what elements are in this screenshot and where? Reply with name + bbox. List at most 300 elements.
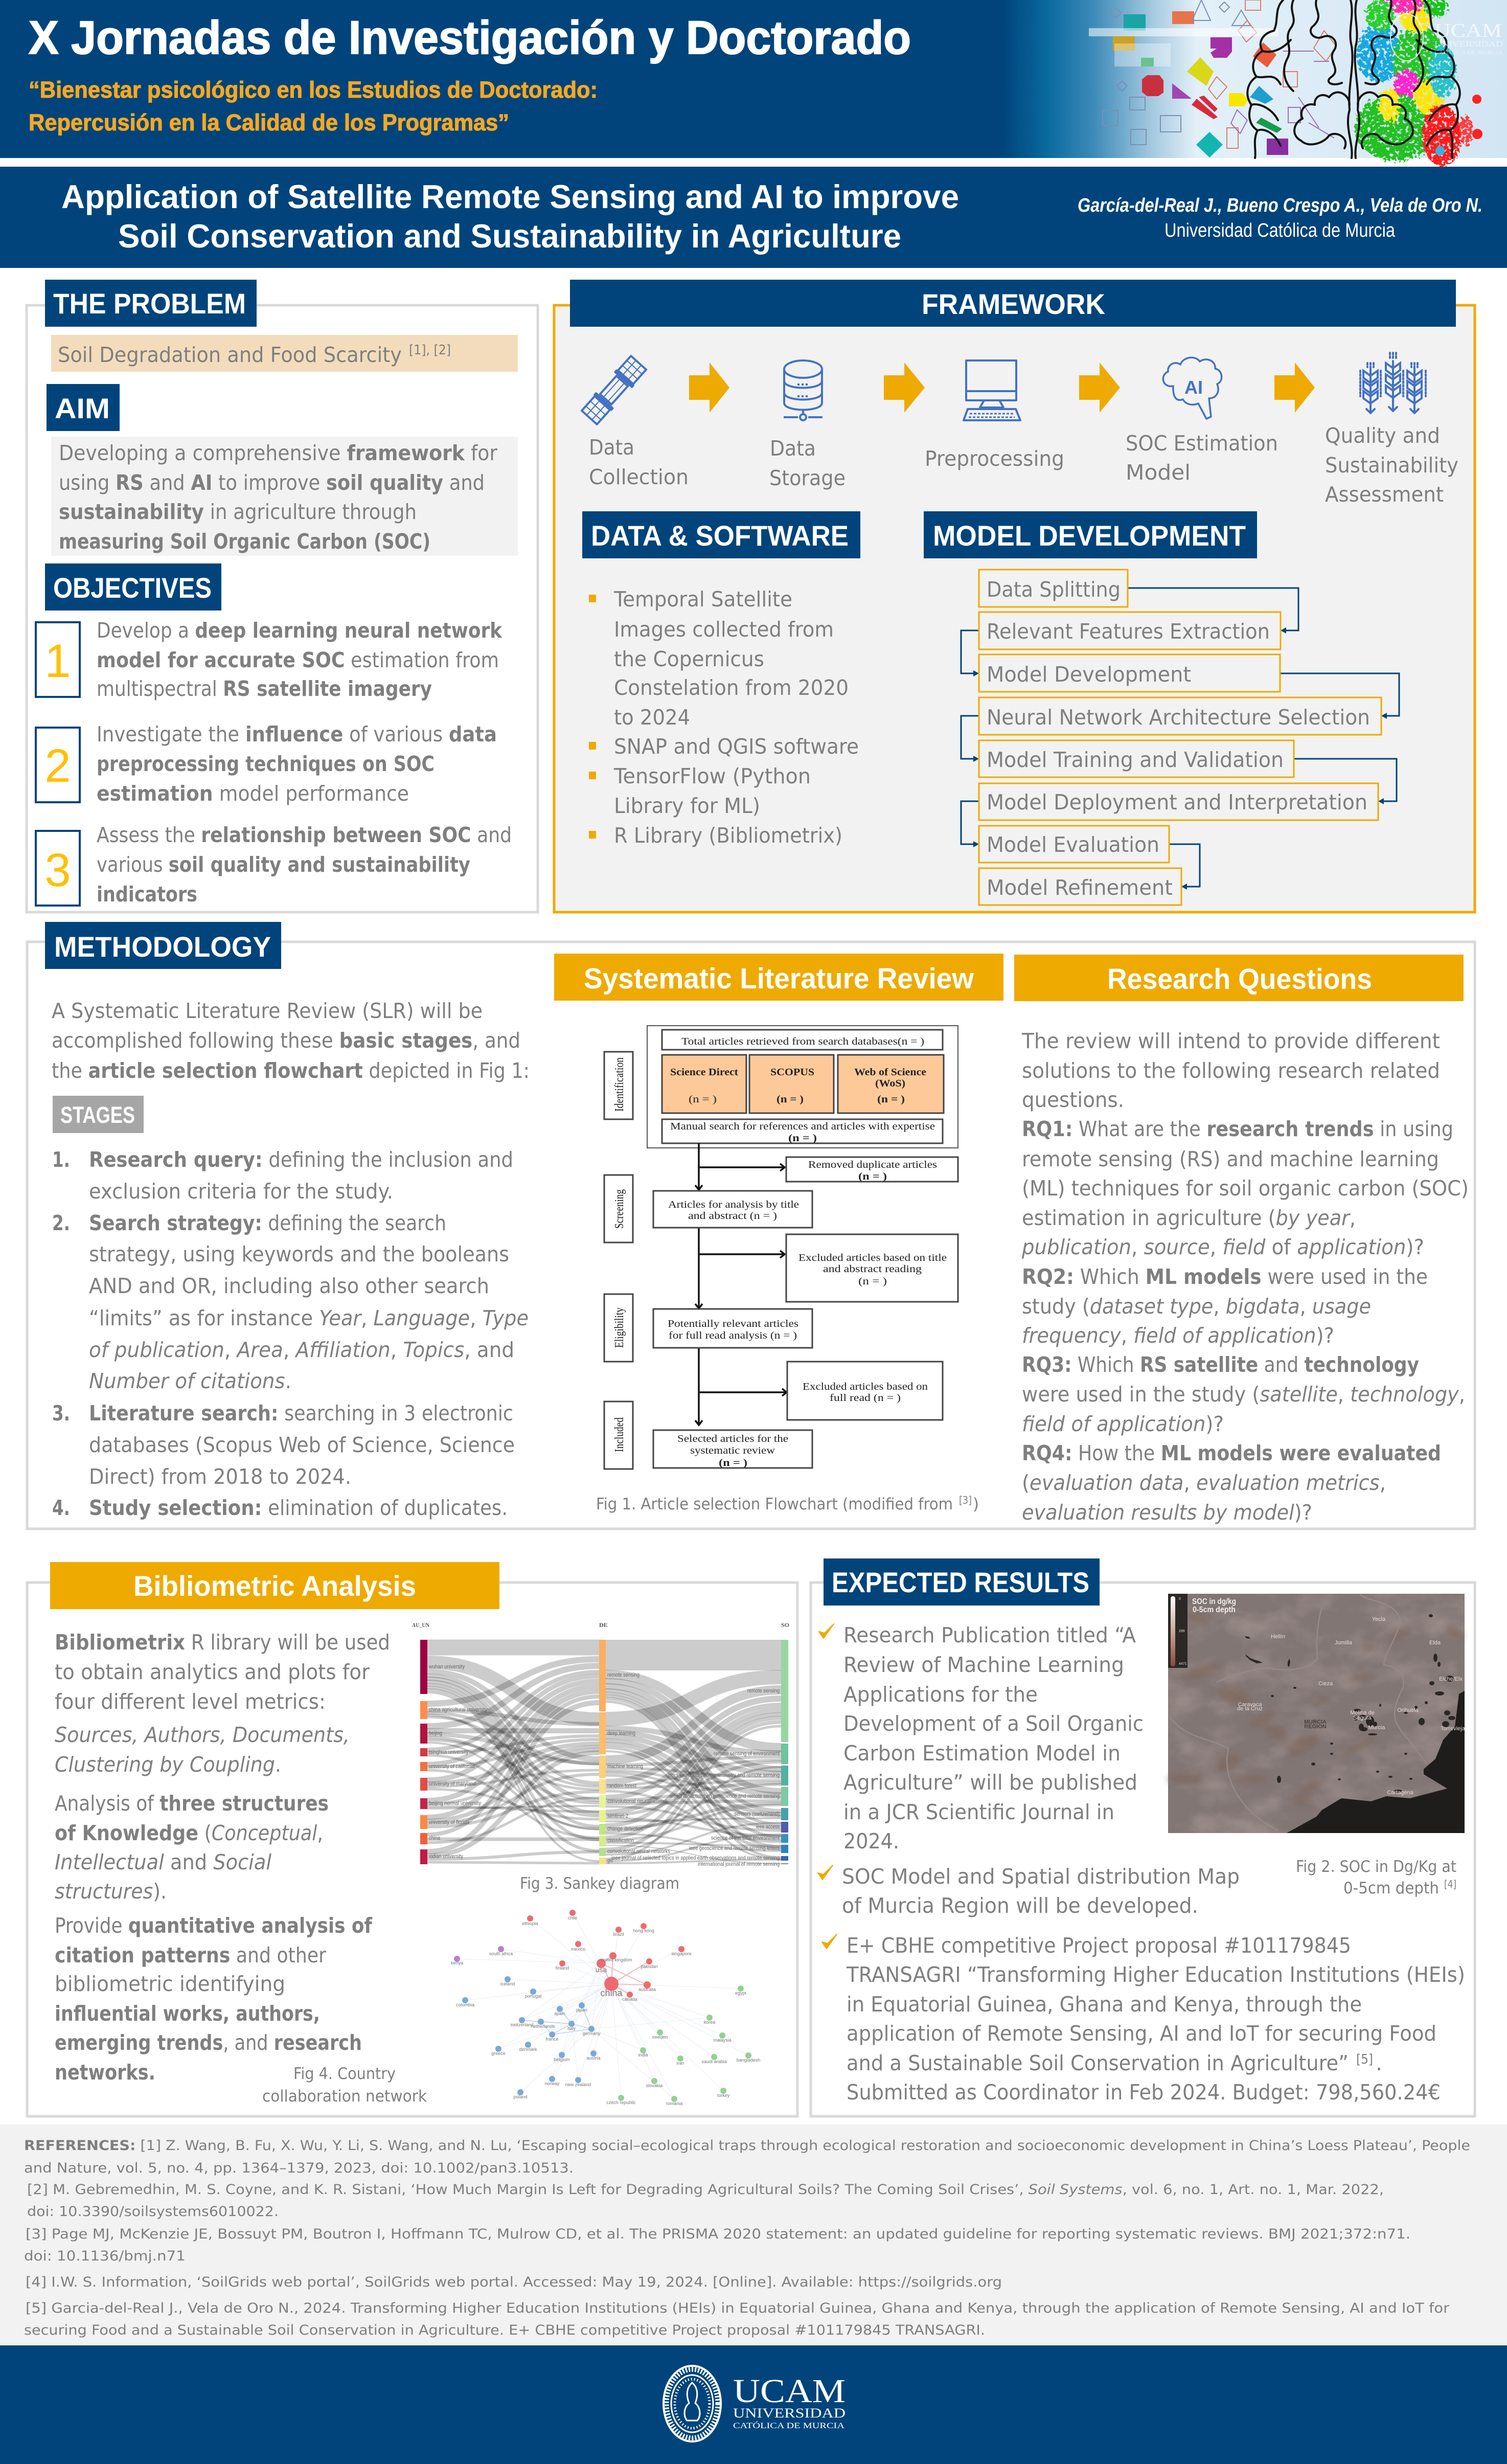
poster title: Application of Satellite Remote Sensing and AI to improve	[61, 178, 959, 215]
footer	[0, 2345, 1507, 2464]
panel: bibliometric analysis	[27, 1562, 797, 2116]
nodes: keywords	[599, 1640, 606, 1864]
node labels: change detection	[607, 1826, 643, 1832]
label: data collection: Data	[589, 435, 634, 460]
heading: the problem	[45, 280, 257, 327]
result 1: Carbon Estimation Model in	[843, 1741, 1121, 1766]
bibliometrix text: Provide quantitative analysis of	[55, 1913, 373, 1938]
figure 1 caption: )	[973, 1495, 979, 1513]
map place names: REGION	[1304, 1724, 1327, 1730]
connectors	[961, 588, 1399, 887]
aim text: Developing a comprehensive framework for	[59, 441, 497, 465]
stages list: of publication, Area, Affiliation, Topics, and	[89, 1338, 514, 1362]
step: data splitting: Data Splitting	[987, 577, 1121, 602]
arrow	[689, 363, 729, 413]
figure 1 caption: Fig 1. Article selection Flowchart (modified from	[596, 1495, 953, 1513]
node labels: beijing	[429, 1730, 442, 1736]
label: data storage	[769, 436, 846, 490]
research questions text: RQ1: What are the research trends in using	[1022, 1117, 1453, 1141]
column headers: SO	[781, 1621, 789, 1629]
problem statement: [1], [2]	[409, 343, 451, 358]
model development flow	[961, 570, 1399, 905]
result 3: in Equatorial Guinea, Ghana and Kenya, through the	[847, 1992, 1362, 2017]
stages list: Study selection: elimination of duplicates.	[89, 1496, 508, 1520]
box: excluded by full read: full read (n = )	[830, 1392, 901, 1404]
step: model refinement: Model Refinement	[987, 875, 1173, 900]
column headers	[412, 1621, 789, 1629]
research questions text: were used in the study (satellite, technology,	[1022, 1382, 1465, 1407]
stages list: Literature search: searching in 3 electronic	[89, 1401, 513, 1426]
heading: systematic literature review	[554, 954, 1003, 1001]
result 1: Agriculture” will be published	[843, 1770, 1137, 1795]
research questions text: (ML) techniques for soil organic carbon (SOC)	[1022, 1176, 1469, 1201]
network labels: finland	[556, 1965, 569, 1971]
icon: satellite	[581, 355, 647, 425]
node labels: sensors (switzerland)	[734, 1811, 780, 1817]
chart: country collaboration network	[451, 1910, 760, 2106]
data and software list: the Copernicus	[614, 647, 764, 671]
map place names: Torrevieja	[1441, 1726, 1466, 1732]
research questions text: frequency, field of application)?	[1022, 1323, 1334, 1348]
heading: data and software: DATA & SOFTWARE	[591, 519, 849, 552]
stages list	[52, 1147, 529, 1520]
map place names: Murcia	[1368, 1725, 1385, 1731]
figure 2 caption: [4]	[1444, 1878, 1456, 1890]
header banner	[0, 0, 1507, 166]
node labels: beijing normal university	[429, 1800, 481, 1806]
chart: article selection flowchart	[604, 1026, 958, 1469]
node labels: tsinghua university	[429, 1749, 468, 1755]
nodes: sources	[781, 1640, 788, 1864]
result 1: Development of a Soil Organic	[843, 1711, 1144, 1736]
poster title band	[0, 167, 1507, 268]
panel: methodology	[27, 922, 1475, 1529]
header brain artwork: UCAM	[1434, 20, 1502, 41]
research questions text: estimation in agriculture (by year,	[1022, 1206, 1356, 1230]
panel: references: [5] Garcia-del-Real J., Vela de Oro N., 2024. Transforming Higher Education Institutions (HEIs) in Equatorial Guinea, Ghana and Kenya, through the application of Remote Sensing, AI and IoT for	[26, 2300, 1450, 2316]
node labels: remote sensing	[747, 1688, 780, 1694]
box: removed duplicates: (n = )	[858, 1171, 887, 1182]
map legend: SOC in dg/kg	[1192, 1597, 1236, 1606]
objective 3: various soil quality and sustainability	[97, 852, 470, 877]
label: data collection: Collection	[589, 465, 689, 489]
nodes: institutions	[420, 1640, 427, 1864]
network labels: canada	[622, 1997, 637, 2002]
label: quality and sustainability assessment: Sustainability	[1325, 453, 1458, 478]
network labels: spain	[554, 2011, 565, 2016]
step: relevant features extraction	[979, 612, 1281, 649]
map roads	[1171, 1594, 1426, 1830]
arrow	[1079, 363, 1120, 413]
panel: references: REFERENCES: [1] Z. Wang, B. Fu, X. Wu, Y. Li, S. Wang, and N. Lu, ‘Escaping social–ecological traps through ecological restoration and socioeconomic development in China’s Loess Plateau’, People	[24, 2138, 1470, 2154]
label: preprocessing: Preprocessing	[925, 446, 1064, 471]
box: manual search: (n = )	[788, 1133, 817, 1144]
map place names: Yecla	[1372, 1616, 1386, 1622]
bibliometrix text: to obtain analytics and plots for	[55, 1660, 370, 1684]
bibliometrix text: emerging trends, and research	[55, 2030, 362, 2055]
heading: the problem: THE PROBLEM	[53, 287, 246, 320]
authors and affiliation	[1078, 195, 1482, 241]
map place names: Segura	[1353, 1715, 1372, 1721]
node labels: machine learning	[607, 1764, 643, 1770]
panel: references: doi: 10.1136/bmj.n71	[24, 2248, 186, 2264]
network labels: pakistan	[641, 1964, 658, 1969]
heading: aim: AIM	[55, 392, 110, 424]
bibliometrix text: networks.	[55, 2060, 155, 2085]
figure 3 caption: Fig 3. Sankey diagram	[520, 1874, 679, 1893]
problem statement	[51, 335, 518, 372]
stages list: Number of citations.	[89, 1369, 291, 1393]
network labels: mexico	[571, 1947, 585, 1952]
figure 2 caption: Fig 2. SOC in Dg/Kg at	[1296, 1858, 1456, 1876]
box: total articles: Total articles retrieved from search databases(n = )	[681, 1036, 924, 1047]
box: excluded by title and abstract: (n = )	[858, 1276, 887, 1287]
figure 1 caption: [3]	[959, 1494, 972, 1506]
network labels: saudi arabia	[701, 2059, 727, 2064]
map place names: MURCIA	[1304, 1719, 1327, 1725]
bibliometrix text: bibliometric identifying	[55, 1972, 285, 1996]
figure 2 caption	[1296, 1858, 1456, 1897]
icon: AI brain: AI	[1184, 377, 1203, 398]
objective 1: Develop a deep learning neural network	[97, 618, 503, 643]
heading: research questions	[1014, 955, 1464, 1001]
objective 2: preprocessing techniques on SOC	[97, 752, 435, 776]
network labels: colombia	[456, 2002, 474, 2007]
box: manual search	[662, 1119, 943, 1144]
node labels: china	[429, 1835, 441, 1841]
event subtitle: “Bienestar psicológico en los Estudios de Doctorado:	[29, 77, 598, 103]
box: articles for analysis: Articles for analysis by title	[668, 1199, 799, 1210]
objective 3: 3	[44, 844, 71, 896]
phase labels	[604, 1052, 633, 1469]
research questions text: RQ2: Which ML models were used in the	[1022, 1264, 1428, 1289]
network labels: ethiopia	[522, 1921, 538, 1926]
flows: institutions to keywords	[427, 1647, 599, 1863]
panel: references: [4] I.W. S. Information, ‘SoilGrids web portal’, SoilGrids web portal. Accessed: May 19, 2024. [Online]. Available: https://soilgrids.org	[26, 2274, 1002, 2290]
network labels: iran	[676, 2061, 684, 2066]
box: science direct: (n = )	[689, 1094, 717, 1105]
network labels: poland	[513, 2094, 528, 2099]
map place names: Hellín	[1271, 1634, 1285, 1640]
map: SOC spatial distribution	[1167, 1594, 1466, 1833]
panel: references: doi: 10.3390/soilsystems6010022.	[27, 2204, 279, 2220]
aim text: measuring Soil Organic Carbon (SOC)	[59, 529, 430, 554]
network labels: usa	[596, 1965, 607, 1974]
network labels: turkey	[717, 2093, 730, 2098]
objective 2: 2	[44, 740, 71, 792]
box: manual search: Manual search for references and articles with expertise	[670, 1121, 935, 1132]
heading: research questions: Research Questions	[1107, 963, 1372, 996]
heading: methodology	[45, 922, 281, 969]
network labels: india	[638, 2052, 648, 2058]
node labels: remote sensing	[607, 1672, 640, 1678]
box: selected articles: (n = )	[719, 1457, 747, 1468]
authors and affiliation: Universidad Católica de Murcia	[1164, 220, 1396, 241]
figure 4 caption	[262, 2065, 427, 2106]
network labels: portugal	[525, 1994, 541, 1999]
node labels: ieee access	[756, 1824, 780, 1830]
label: quality and sustainability assessment: Quality and	[1325, 423, 1440, 448]
objective 1: model for accurate SOC estimation from	[97, 648, 499, 672]
node labels: university of california	[429, 1764, 475, 1770]
network labels: belgium	[554, 2057, 570, 2062]
stages list: Direct) from 2018 to 2024.	[89, 1464, 351, 1489]
map urban areas	[1245, 1614, 1455, 1793]
result 3: TRANSAGRI “Transforming Higher Education Institutions (HEIs)	[846, 1962, 1465, 1987]
heading: systematic literature review: Systematic Literature Review	[584, 962, 974, 995]
node labels: deep learning	[607, 1730, 635, 1736]
figure 2 caption: 0-5cm depth	[1343, 1879, 1439, 1897]
step: neural network architecture selection	[979, 697, 1381, 735]
bibliometrix text: four different level metrics:	[55, 1689, 326, 1714]
bibliometrix text: Analysis of three structures	[55, 1791, 329, 1816]
node labels: china agricultural university	[429, 1707, 487, 1713]
methodology intro: A Systematic Literature Review (SLR) will be	[52, 999, 483, 1023]
network labels: czech republic	[606, 2100, 636, 2105]
map place names	[1237, 1616, 1466, 1796]
icon: data storage	[784, 360, 823, 420]
poster title	[61, 178, 959, 255]
network labels: romania	[666, 2101, 682, 2106]
bibliometrix text: Bibliometrix R library will be used	[55, 1630, 390, 1655]
map place names: Cieza	[1318, 1681, 1333, 1687]
box: articles for analysis: and abstract (n = )	[688, 1210, 777, 1222]
result 1	[819, 1623, 1144, 1853]
box: potentially relevant: Potentially relevant articles	[668, 1318, 798, 1329]
stages tag: STAGES	[60, 1102, 135, 1128]
network labels: italy	[567, 2026, 576, 2031]
phase labels: Screening	[613, 1189, 626, 1229]
map place names: Elda	[1429, 1640, 1441, 1646]
network labels: malaysia	[713, 2038, 732, 2043]
heading: bibliometric analysis	[50, 1562, 499, 1609]
arrow	[884, 363, 925, 413]
aim text	[51, 437, 518, 556]
network labels: egypt	[735, 1991, 747, 1996]
figure 4 caption: Fig 4. Country	[293, 2065, 396, 2083]
label: data collection	[589, 435, 689, 489]
network labels: south africa	[489, 1951, 513, 1956]
step: model development	[979, 654, 1280, 692]
methodology intro: the article selection flowchart depicted in Fig 1:	[52, 1058, 530, 1083]
result 1: Applications for the	[843, 1682, 1038, 1707]
heading: framework	[570, 280, 1456, 327]
node labels: classification	[607, 1838, 634, 1844]
research questions text: remote sensing (RS) and machine learning	[1022, 1147, 1439, 1171]
research questions text: RQ3: Which RS satellite and technology	[1022, 1352, 1419, 1377]
result 2: of Murcia Region will be developed.	[842, 1893, 1198, 1918]
network labels: switzerland	[510, 2022, 534, 2027]
panel: problem, aim, objectives	[27, 280, 538, 912]
box: scopus: SCOPUS	[770, 1067, 814, 1078]
node labels: ieee transactions on geoscience and remote sensing	[670, 1793, 780, 1799]
panel: references: securing Food and a Sustainable Soil Conservation in Agriculture. E+ CBHE competitive Project proposal #101179845 TRANSAGRI.	[24, 2322, 985, 2338]
panel: framework	[554, 280, 1475, 912]
panel: references: [2] M. Gebremedhin, M. S. Coyne, and K. R. Sistani, ‘How Much Margin Is Left for Degrading Agricultural Soils? The Coming Soil Crises’, Soil Systems , vol. 6, no. 1, Art. no. 1, Mar. 2022,	[27, 2182, 1384, 2198]
node labels: xidian university	[429, 1853, 463, 1860]
network labels: germany	[582, 2031, 601, 2036]
objective 1: 1	[44, 635, 71, 687]
box: total articles	[662, 1030, 943, 1050]
result 3: and a Sustainable Soil Conservation in Agriculture”	[847, 2051, 1349, 2075]
network labels: austria	[586, 2055, 601, 2061]
box: potentially relevant: for full read analysis (n = )	[669, 1330, 797, 1341]
result 1: Review of Machine Learning	[843, 1653, 1124, 1677]
label: data storage: Storage	[769, 466, 846, 490]
map place names: Molina de	[1350, 1710, 1375, 1716]
bibliometrix text: structures).	[55, 1879, 167, 1904]
label: quality and sustainability assessment: Assessment	[1325, 482, 1444, 507]
header brain artwork: CATÓLICA DE MURCIA	[1434, 50, 1503, 56]
map legend: 4471	[1179, 1662, 1187, 1666]
stages list: databases (Scopus Web of Science, Science	[89, 1433, 515, 1457]
box: web of science: Web of Science	[854, 1067, 926, 1078]
poster title: Soil Conservation and Sustainability in Agriculture	[118, 217, 901, 255]
map place names: Cartagena	[1387, 1790, 1414, 1796]
step: model evaluation	[979, 826, 1169, 863]
label: SOC estimation model: SOC Estimation	[1126, 431, 1278, 456]
box: web of science	[838, 1055, 944, 1113]
research questions text	[1021, 1029, 1469, 1525]
bibliometrix text: Sources, Authors, Documents,	[55, 1723, 350, 1747]
label: quality and sustainability assessment	[1325, 423, 1458, 507]
heading: model development: MODEL DEVELOPMENT	[933, 519, 1246, 552]
network nodes	[454, 1910, 751, 2102]
result 3: application of Remote Sensing, AI and IoT for securing Food	[847, 2021, 1436, 2046]
heading: objectives: OBJECTIVES	[53, 572, 212, 604]
box: excluded by full read: Excluded articles based on	[803, 1381, 928, 1392]
node labels: science of the total environment	[711, 1835, 780, 1841]
map legend	[1168, 1594, 1236, 1668]
research questions text: field of application)?	[1022, 1412, 1224, 1436]
bibliometrix text: influential works, authors,	[55, 2001, 320, 2026]
network labels: kenya	[451, 1960, 463, 1965]
box: removed duplicates: Removed duplicate articles	[808, 1159, 937, 1170]
data and software list: Temporal Satellite	[613, 587, 792, 612]
node labels	[428, 1664, 780, 1867]
objective 3	[36, 823, 512, 907]
data and software list: SNAP and QGIS software	[614, 734, 859, 759]
network labels: norway	[544, 2081, 560, 2086]
node labels: ieee geoscience and remote sensing letters	[689, 1845, 780, 1851]
icon: computer	[964, 360, 1020, 420]
column headers: DE	[599, 1621, 608, 1629]
result 3: E+ CBHE competitive Project proposal #101179845	[847, 1933, 1351, 1958]
stages list: 2.	[52, 1211, 70, 1235]
network labels: singapore	[671, 1951, 692, 1956]
step: relevant features extraction: Relevant Features Extraction	[987, 619, 1270, 644]
node labels: convolutional neural networks	[607, 1848, 670, 1855]
box: web of science: (n = )	[877, 1094, 905, 1105]
box: excluded by title and abstract: and abstract reading	[823, 1263, 922, 1275]
network labels: bangladesh	[737, 2058, 760, 2063]
panel: references: and Nature, vol. 5, no. 4, pp. 1364–1379, 2023, doi: 10.1002/pan3.10513.	[24, 2160, 574, 2176]
result 1: Research Publication titled “A	[843, 1623, 1136, 1647]
objective 3: Assess the relationship between SOC and	[97, 823, 512, 847]
box: web of science: (WoS)	[875, 1078, 905, 1089]
label: data storage: Data	[770, 436, 816, 461]
network labels: chile	[568, 1915, 577, 1920]
stages list: “limits” as for instance Year, Language, Type	[89, 1306, 529, 1330]
node labels: university of florida	[429, 1819, 470, 1825]
network labels: new zealand	[565, 2082, 591, 2087]
data and software list: Images collected from	[614, 617, 834, 642]
step: model training and validation: Model Training and Validation	[987, 748, 1284, 772]
result 1: in a JCR Scientific Journal in	[843, 1800, 1114, 1824]
map place names: Caravaca	[1238, 1702, 1262, 1708]
logo: university seal	[664, 2366, 721, 2442]
step: model deployment and interpretation: Model Deployment and Interpretation	[987, 790, 1367, 815]
node labels: university of maryland	[429, 1781, 476, 1787]
box: excluded by title and abstract	[786, 1234, 958, 1302]
box: excluded by full read	[787, 1362, 943, 1420]
box: selected articles: Selected articles for the	[677, 1433, 788, 1444]
phase labels: Included	[613, 1417, 626, 1452]
header brain artwork	[1002, 0, 1507, 166]
research questions text: (evaluation data, evaluation metrics,	[1022, 1471, 1386, 1495]
box: science direct: Science Direct	[670, 1067, 738, 1078]
heading: model development	[924, 511, 1257, 558]
logo: UCAM wordmark: UNIVERSIDAD	[733, 2406, 846, 2421]
objective 2: Investigate the influence of various data	[97, 722, 497, 747]
map place names: Elche/Elx	[1439, 1676, 1463, 1682]
bibliometrix text: of Knowledge (Conceptual,	[55, 1821, 323, 1845]
methodology intro: accomplished following these basic stages, and	[52, 1028, 520, 1053]
stages list: 3.	[52, 1401, 70, 1426]
objective 2: estimation model performance	[97, 781, 409, 806]
bibliometrix text: Clustering by Coupling.	[55, 1752, 281, 1777]
panel: references	[0, 2124, 1507, 2345]
network labels: china	[600, 1988, 623, 1998]
node labels: convolutional neuralnetwork	[607, 1798, 668, 1804]
network labels: korea	[704, 2020, 715, 2025]
box: scopus	[749, 1055, 834, 1113]
data and software list: R Library (Bibliometrix)	[614, 823, 842, 848]
map legend: 299	[1179, 1630, 1185, 1633]
stages list: strategy, using keywords and the booleans	[89, 1242, 509, 1267]
problem statement: Soil Degradation and Food Scarcity	[58, 343, 402, 367]
network edges	[457, 1913, 748, 2099]
flows: keywords to sources	[606, 1655, 781, 1864]
event subtitle	[29, 77, 598, 135]
step: model evaluation: Model Evaluation	[987, 832, 1159, 857]
header brain artwork: UNIVERSIDAD	[1434, 40, 1503, 49]
result 3: .	[1376, 2051, 1382, 2075]
node labels: international journal of remote sensing	[698, 1861, 780, 1867]
network labels: united kingdom	[601, 1957, 632, 1962]
icon: wheat	[1360, 353, 1426, 413]
node labels: ieee journal of selected topics in applied earth observations and remote sensing	[611, 1855, 780, 1861]
step: model training and validation	[979, 740, 1294, 777]
map legend: 0-5cm depth	[1193, 1606, 1236, 1614]
step: model development: Model Development	[987, 662, 1191, 687]
result 3	[822, 1933, 1465, 2105]
label: SOC estimation model	[1126, 431, 1278, 485]
map place names: de la Cruz	[1237, 1706, 1263, 1712]
data and software list	[589, 587, 859, 848]
node labels: random forest	[607, 1783, 636, 1789]
box: potentially relevant	[653, 1309, 812, 1348]
network labels: netherlands	[531, 2024, 555, 2029]
box: excluded by title and abstract: Excluded articles based on title	[798, 1252, 947, 1263]
result 2: SOC Model and Spatial distribution Map	[842, 1864, 1240, 1889]
phase labels: Identification	[613, 1057, 626, 1112]
event title: X Jornadas de Investigación y Doctorado	[29, 12, 911, 64]
heading: framework: FRAMEWORK	[922, 288, 1105, 320]
data and software list: Library for ML)	[614, 794, 760, 818]
aim text: using RS and AI to improve soil quality and	[59, 470, 485, 495]
heading: expected results: EXPECTED RESULTS	[832, 1566, 1089, 1598]
